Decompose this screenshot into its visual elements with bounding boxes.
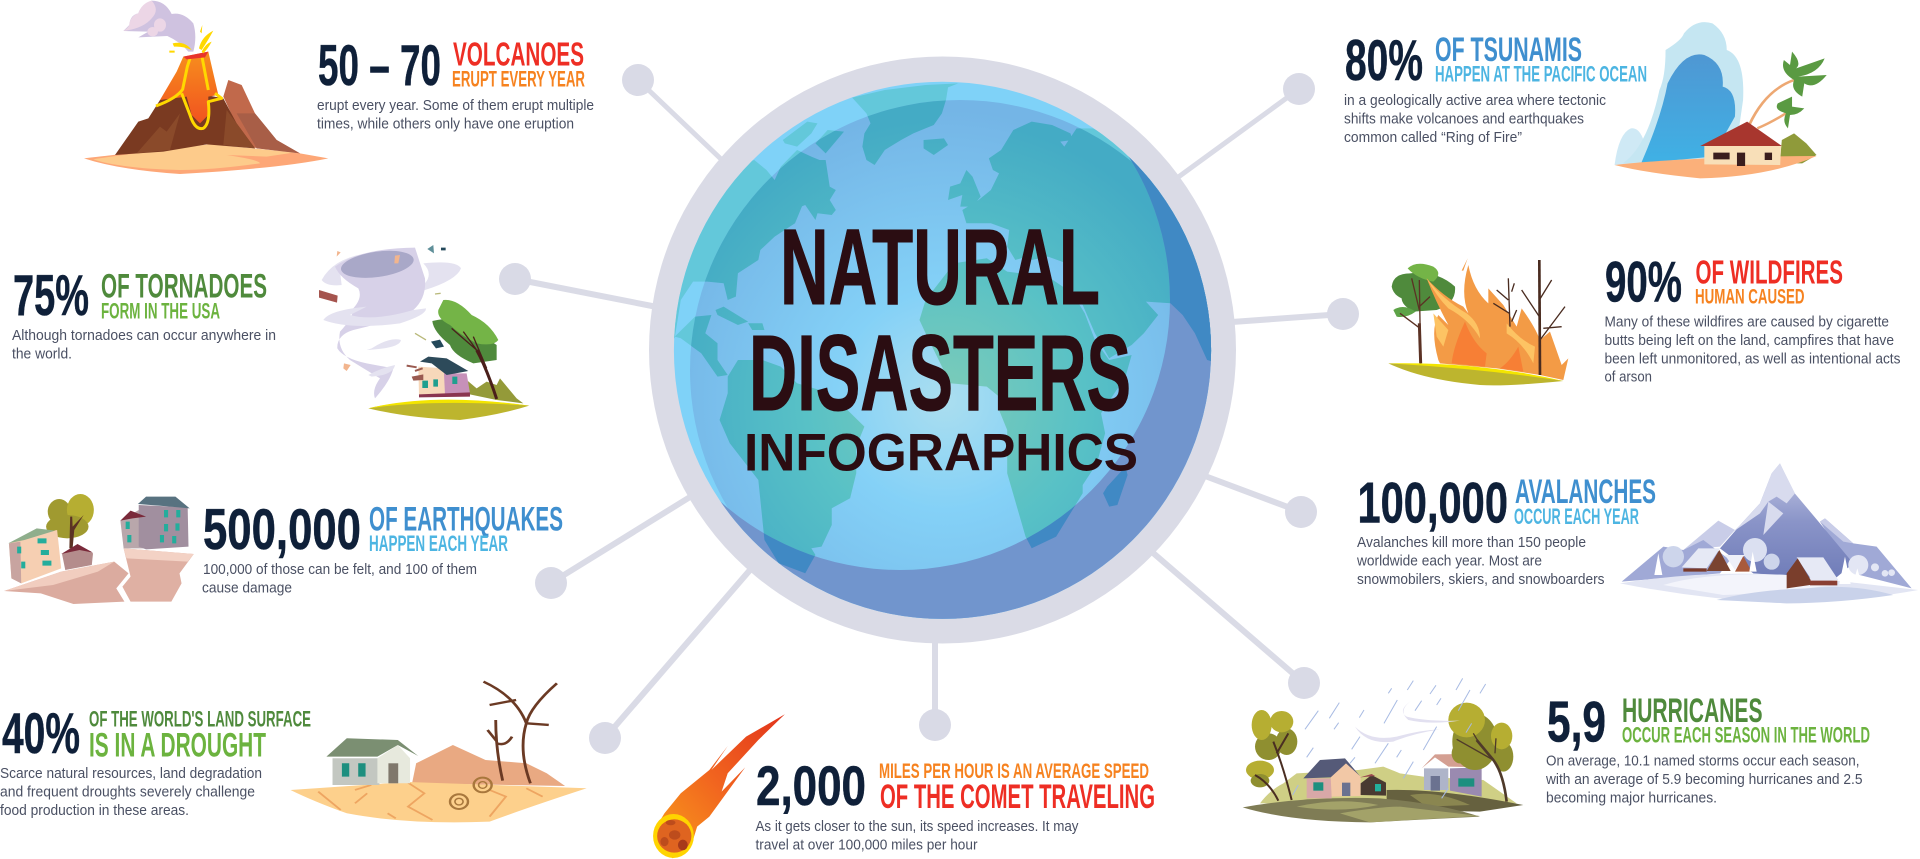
heading: 500,000 of earthquakes: 500,000 — [203, 498, 361, 562]
panel: earthquakes — [4, 494, 563, 604]
title: NATURAL — [780, 206, 1100, 327]
title — [744, 206, 1138, 482]
body text: and frequent droughts severely challenge — [0, 784, 255, 800]
heading: 80% of tsunamis: OF TSUNAMIS — [1435, 31, 1582, 69]
body text: cause damage — [202, 580, 292, 596]
heading: 50-70 volcanoes: 50 – 70 — [318, 34, 441, 98]
body text — [756, 819, 1079, 853]
heading: 500,000 of earthquakes: HAPPEN EACH YEAR — [369, 531, 508, 556]
body text: food production in these areas. — [0, 803, 189, 819]
body text: shifts make volcanoes and earthquakes — [1344, 111, 1584, 127]
panel: tsunamis — [1344, 22, 1827, 178]
heading: 5,9 hurricanes: HURRICANES — [1622, 692, 1762, 730]
body text: the world. — [12, 346, 72, 362]
body text: with an average of 5.9 becoming hurricanes and 2.5 — [1545, 772, 1863, 788]
heading: 80% of tsunamis: HAPPEN AT THE PACIFIC OCEAN — [1435, 62, 1647, 87]
body text: Many of these wildfires are caused by cigarette — [1604, 315, 1889, 331]
panel: volcanoes — [84, 1, 594, 174]
illustration: comet — [653, 714, 785, 858]
illustration: tsunami — [1615, 22, 1827, 178]
heading: 5,9 hurricanes: 5,9 — [1547, 691, 1606, 755]
illustration: drought — [290, 682, 587, 822]
body text: Although tornadoes can occur anywhere in — [12, 328, 276, 344]
heading: 500,000 of earthquakes: OF EARTHQUAKES — [369, 501, 563, 539]
heading: 5,9 hurricanes — [1547, 691, 1870, 755]
heading: 90% of wildfires — [1605, 251, 1843, 315]
heading: 40% of the world's land surface: 40% — [2, 702, 80, 766]
panel: drought — [0, 682, 587, 822]
heading: 80% of tsunamis: 80% — [1345, 29, 1423, 93]
connector lines and dots — [499, 64, 1359, 754]
body text: Scarce natural resources, land degradation — [0, 766, 262, 782]
body text — [1545, 754, 1863, 806]
body text — [202, 562, 477, 596]
heading: 2,000 miles per hour: OF THE COMET TRAVELING — [880, 778, 1155, 816]
heading: 90% of wildfires: 90% — [1605, 251, 1682, 315]
heading: 50-70 volcanoes: ERUPT EVERY YEAR — [452, 67, 585, 92]
body text: of arson — [1604, 370, 1652, 386]
body text — [12, 328, 276, 362]
heading: 80% of tsunamis — [1345, 29, 1647, 93]
heading: 100,000 avalanches — [1358, 472, 1656, 536]
panel: hurricanes — [1243, 678, 1870, 822]
body text — [317, 98, 594, 132]
body text — [1356, 535, 1604, 588]
body text: travel at over 100,000 miles per hour — [756, 837, 978, 853]
body text — [1604, 315, 1900, 386]
heading: 75% of tornadoes — [13, 264, 267, 328]
globe — [649, 56, 1236, 644]
heading: 40% of the world's land surface — [2, 702, 311, 766]
body text: times, while others only have one eruption — [317, 116, 574, 132]
illustration: snowy mountain — [1620, 463, 1918, 603]
heading: 2,000 miles per hour: 2,000 — [756, 754, 866, 817]
body text: erupt every year. Some of them erupt multiple — [317, 98, 594, 114]
body text: snowmobilers, skiers, and snowboarders — [1357, 572, 1604, 588]
heading: 75% of tornadoes: 75% — [13, 264, 89, 328]
heading: 100,000 avalanches: 100,000 — [1358, 472, 1508, 536]
heading: 40% of the world's land surface: OF THE WORLD'S LAND SURFACE — [89, 707, 311, 732]
heading: 100,000 avalanches: OCCUR EACH YEAR — [1514, 504, 1639, 529]
heading: 75% of tornadoes: OF TORNADOES — [101, 268, 267, 306]
title: INFOGRAPHICS — [744, 424, 1138, 482]
heading: 100,000 avalanches: AVALANCHES — [1515, 473, 1656, 511]
heading: 2,000 miles per hour — [756, 754, 1155, 817]
panel: tornadoes — [12, 245, 529, 420]
body text: becoming major hurricanes. — [1546, 790, 1717, 806]
body text: As it gets closer to the sun, its speed increases. It may — [756, 819, 1079, 835]
panel: avalanches — [1356, 463, 1918, 603]
heading: 50-70 volcanoes: VOLCANOES — [453, 36, 584, 73]
body text — [0, 766, 262, 819]
title: DISASTERS — [749, 312, 1131, 433]
body text: 100,000 of those can be felt, and 100 of them — [203, 562, 477, 578]
body text: On average, 10.1 named storms occur each season, — [1546, 754, 1860, 770]
body text: been left unmonitored, as well as intentional acts — [1604, 351, 1900, 367]
illustration: volcano — [84, 1, 328, 174]
body text: in a geologically active area where tectonic — [1344, 93, 1606, 109]
body text: Avalanches kill more than 150 people — [1357, 535, 1586, 551]
illustration: wildfire — [1388, 258, 1568, 385]
body text — [1344, 93, 1606, 146]
body text: common called “Ring of Fire” — [1344, 130, 1522, 146]
heading: 500,000 of earthquakes — [203, 498, 563, 562]
illustration: tornado — [319, 245, 529, 420]
body text: worldwide each year. Most are — [1356, 553, 1542, 569]
panel: wildfires — [1388, 251, 1900, 386]
body text: butts being left on the land, campfires that have — [1604, 333, 1894, 349]
illustration: earthquake — [4, 494, 194, 604]
panel: comet — [653, 714, 1155, 858]
heading: 90% of wildfires: HUMAN CAUSED — [1695, 284, 1804, 308]
illustration: hurricane — [1243, 678, 1523, 822]
heading: 75% of tornadoes: FORM IN THE USA — [101, 298, 220, 323]
heading: 2,000 miles per hour: MILES PER HOUR IS AN AVERAGE SPEED — [879, 760, 1149, 783]
heading: 40% of the world's land surface: IS IN A DROUGHT — [89, 727, 266, 765]
